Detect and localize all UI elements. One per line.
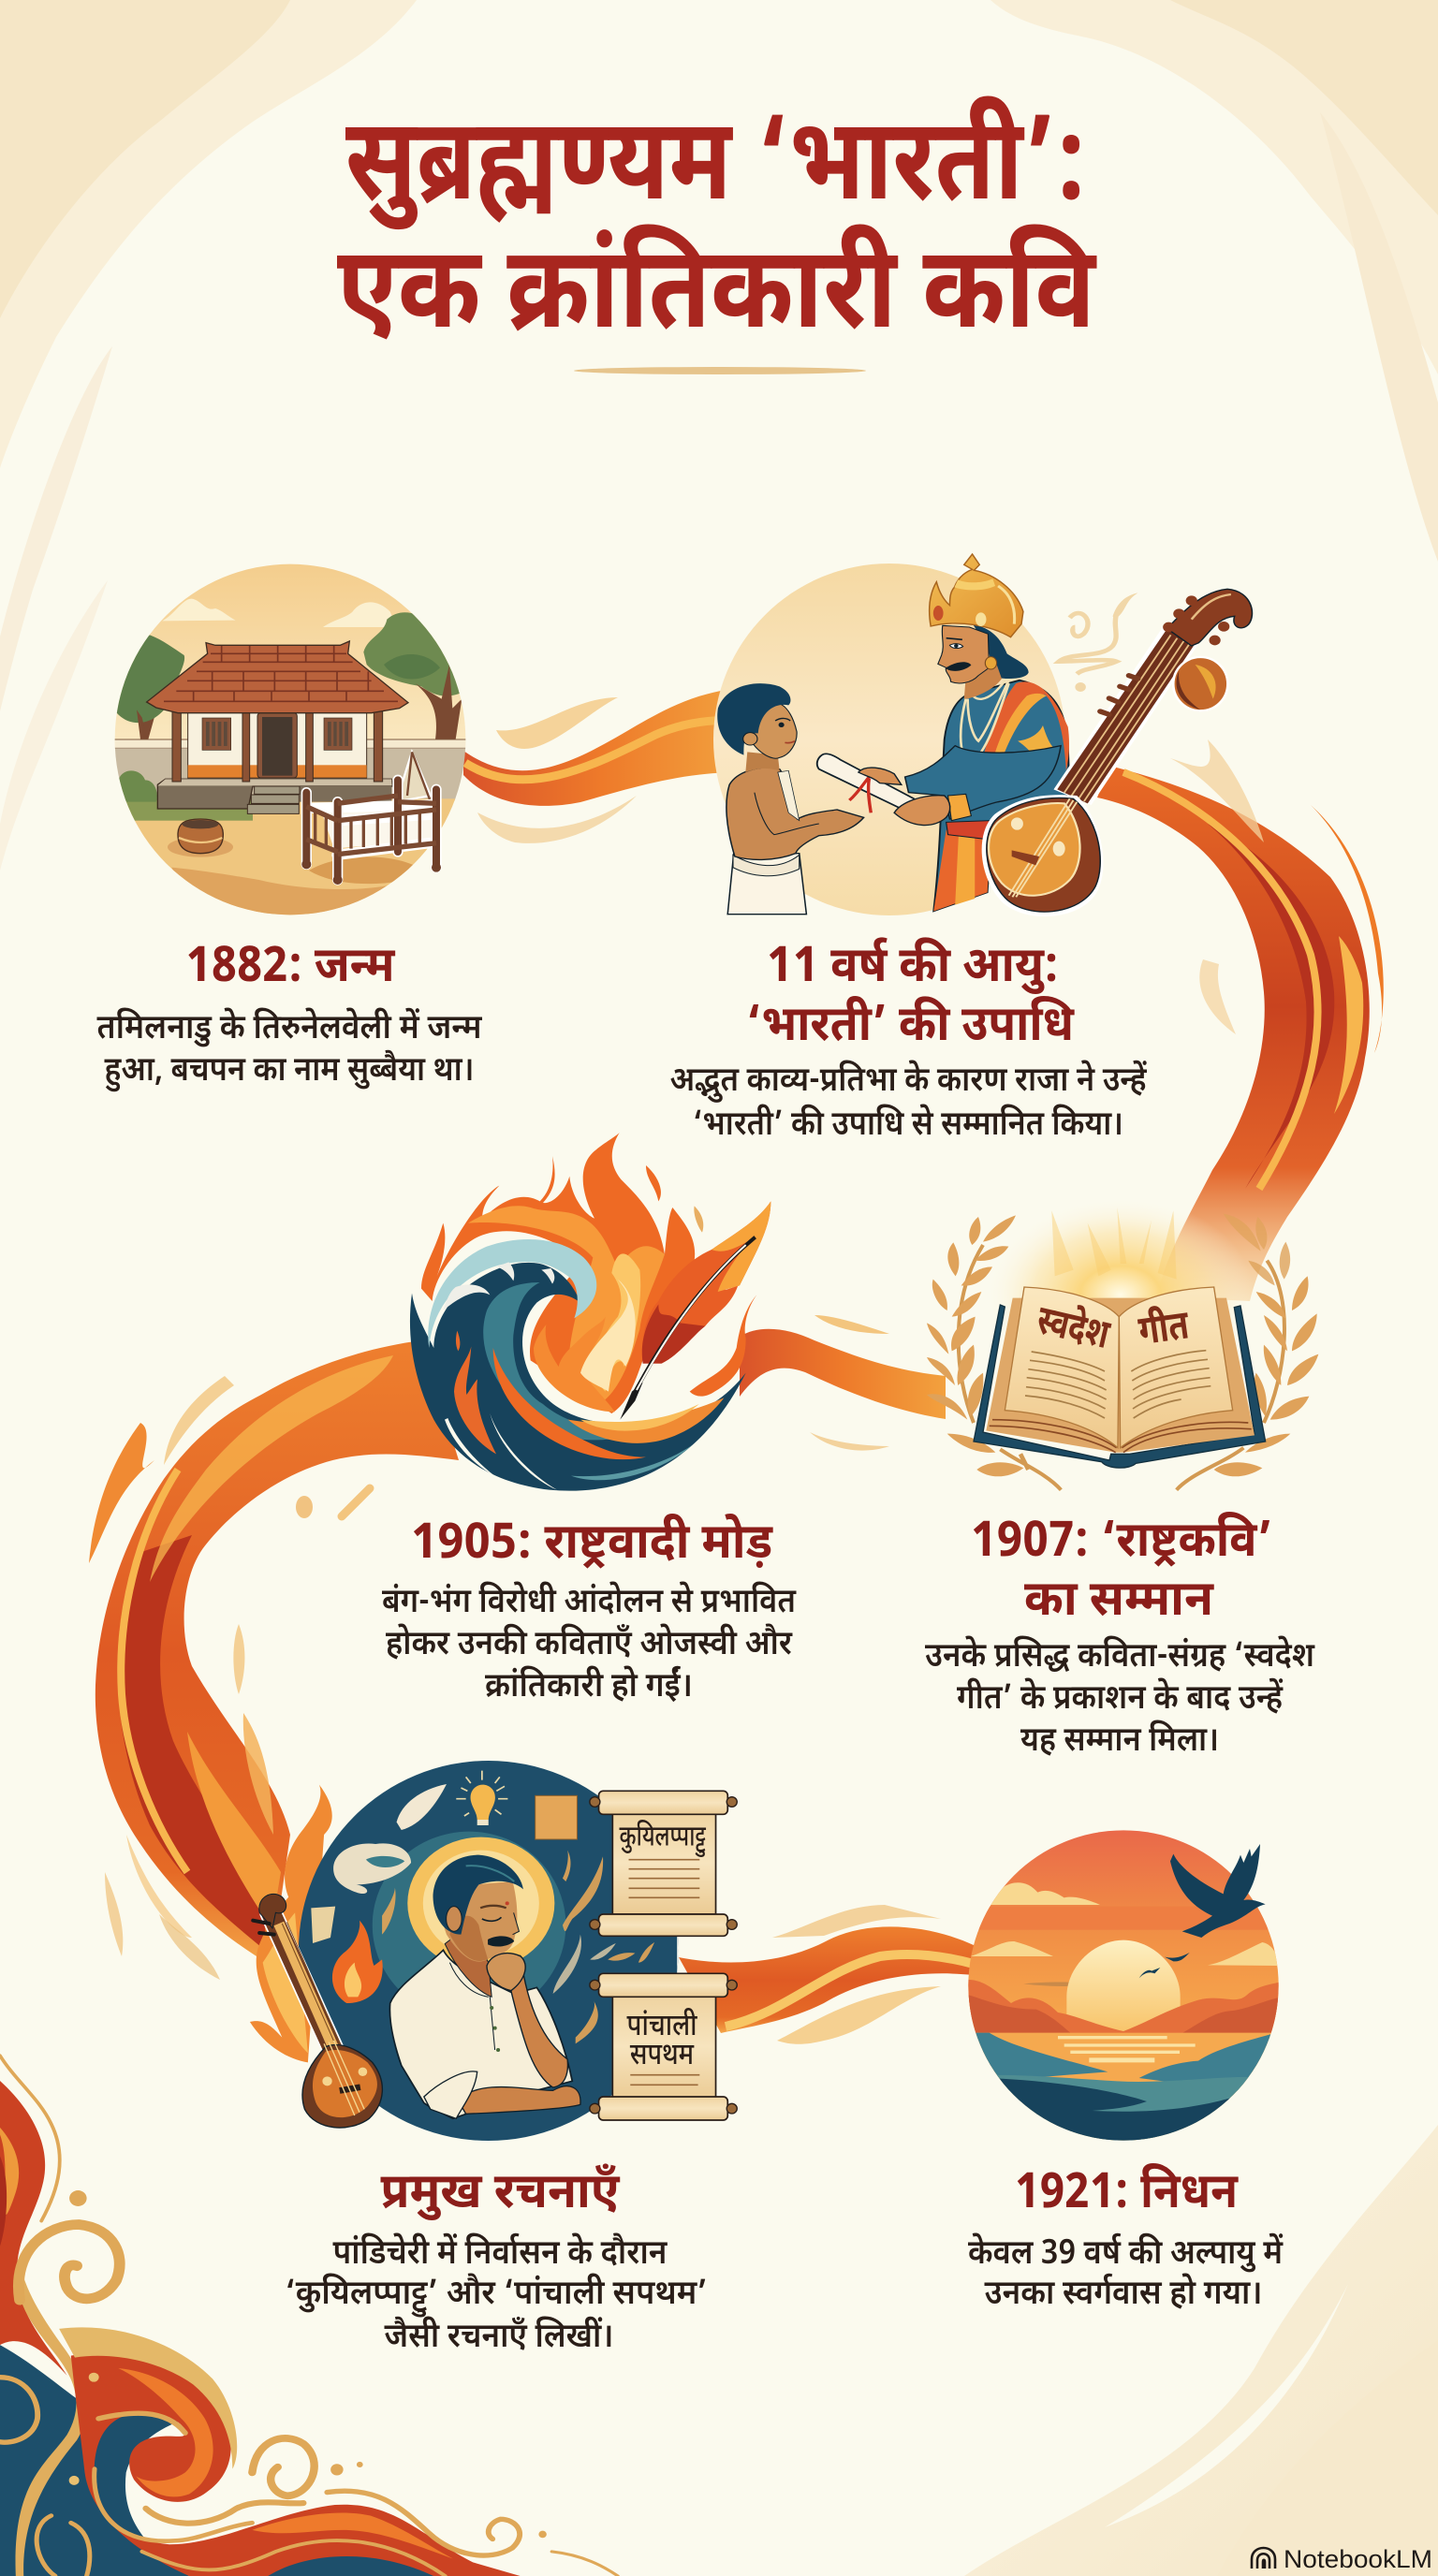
scroll: panchali sapatham: पांचाली [626, 2008, 698, 2048]
bird [1170, 1844, 1266, 1938]
illustration: wave, flame and quill [410, 1133, 770, 1491]
lower teal band [268, 2556, 433, 2576]
illustration: poet with veena and scrolls [250, 1750, 737, 2156]
milestone: 1921 death: 1921: निधन [1015, 2164, 1239, 2228]
milestone: 1907 national poet [925, 1513, 1315, 1764]
neck [445, 1925, 492, 1997]
milestone: 1882 birth: 1882: जन्म [185, 938, 396, 1002]
laurel left [927, 1215, 1061, 1490]
notebooklm badge: NotebookLM [1284, 2545, 1432, 2573]
milestone: 1907 national poet: गीत’ के प्रकाशन के बाद उन्हें [957, 1676, 1284, 1722]
motif: flame [332, 1921, 383, 2003]
boy [717, 683, 864, 915]
king neck [964, 658, 1002, 699]
motif: inkwell swirl [333, 1843, 411, 1894]
flames on wave [493, 1348, 646, 1459]
clay pot [168, 837, 233, 857]
veena [253, 1894, 382, 2128]
milestone: 1905 turning point: बंग-भंग विरोधी आंदोलन से प्रभावित [382, 1580, 797, 1626]
scroll [817, 754, 915, 810]
milestone: age 11 title: ‘भारती’ की उपाधि [746, 996, 1075, 1061]
armband [1018, 725, 1055, 759]
white streaks [445, 1413, 557, 1490]
gold strokes [0, 2056, 618, 2576]
milestone: 1907 national poet: 1907: ‘राष्ट्रकवि’ [971, 1513, 1272, 1576]
milestone: 1921 death: उनका स्वर्गवास हो गया। [985, 2273, 1262, 2318]
sun [1066, 1940, 1181, 2033]
shirt [389, 1950, 572, 2118]
cradle [301, 752, 441, 885]
house platform [157, 779, 393, 809]
quill shaft [620, 1383, 643, 1420]
ribbon: works to 1921 [679, 1905, 974, 2044]
milestone: 1882 birth: हुआ, बचपन का नाम सुब्बैया था। [105, 1048, 474, 1094]
red flame column [0, 2081, 67, 2376]
pages [1005, 1287, 1119, 1448]
milestone: age 11 title: 11 वर्ष की आयु: [767, 937, 1059, 1002]
feather [642, 1201, 770, 1364]
necklaces [961, 681, 1009, 765]
scroll: kuyil pattu [590, 1791, 737, 1936]
house wall [188, 704, 367, 778]
door [257, 713, 297, 778]
wave body [410, 1263, 746, 1491]
glow [986, 1198, 1255, 1392]
motif: feather [397, 1784, 447, 1830]
ribbon: 1905 to book [740, 1315, 946, 1451]
sun disc behind king [713, 564, 1065, 915]
inner flames [534, 1317, 615, 1412]
king robe [933, 681, 1069, 911]
decorative corner wash: bottom right [964, 2125, 1438, 2576]
page lines [1025, 1351, 1211, 1418]
milestone: major works: जैसी रचनाएँ लिखीं। [384, 2315, 614, 2361]
milestone: 1905 turning point [382, 1515, 797, 1710]
dhoti [933, 830, 990, 911]
page title: geet: गीत [1136, 1301, 1194, 1361]
page stack [986, 1298, 1255, 1453]
book cover [974, 1305, 1266, 1468]
side flames [250, 1785, 332, 2062]
milestone: major works: ‘कुयिलप्पाट्टु’ और ‘पांचाली सपथम’ [285, 2273, 708, 2318]
scroll: kuyil pattu: कुयिलप्पाट्टु [620, 1819, 706, 1858]
small birds [1139, 1953, 1190, 1978]
milestone: 1907 national poet: का सम्मान [1024, 1572, 1214, 1635]
pillars [172, 704, 383, 782]
hand [487, 1954, 525, 1991]
face [437, 1881, 517, 1962]
halo [407, 1837, 554, 1969]
gold column [15, 2264, 86, 2576]
laurel right [1177, 1214, 1318, 1490]
king hair [973, 624, 1029, 679]
illustration: sunset circle [964, 1825, 1283, 2148]
motif streaks [382, 1851, 654, 2043]
portrait disc [299, 1761, 679, 2141]
red swirl [71, 2352, 521, 2576]
tiled roof [147, 641, 408, 713]
milestone: 1882 birth: तमिलनाडु के तिरुनेलवेली में जन्म [97, 1006, 483, 1052]
milestone: 1905 turning point: होकर उनकी कविताएँ ओजस्वी और [386, 1622, 792, 1668]
title [337, 96, 1097, 373]
milestone: 1921 death [968, 2164, 1284, 2318]
milestone: 1907 national poet: यह सम्मान मिला। [1020, 1720, 1219, 1764]
decorative corner washes: top right [990, 0, 1438, 562]
king face [938, 625, 990, 683]
milestone: major works: पांडिचेरी में निर्वासन के दौरान [333, 2232, 668, 2277]
scroll: panchali sapatham [590, 1973, 737, 2120]
outer flames [421, 1133, 695, 1413]
sky [112, 562, 468, 749]
veena [982, 589, 1252, 916]
title divider [574, 367, 866, 374]
shawl [978, 681, 1069, 783]
corner ornament: bottom left swirl [0, 2056, 618, 2576]
compound wall [112, 739, 468, 748]
illustration: birth house and cradle [112, 562, 468, 924]
hair [433, 1855, 523, 1935]
poet figure [389, 1855, 580, 2118]
milestone: major works: प्रमुख रचनाएँ [380, 2163, 621, 2228]
milestone: 1905 turning point: क्रांतिकारी हो गईं। [485, 1665, 693, 1710]
gold sweep over swirl [59, 2327, 237, 2469]
ribbon: 1905 down to works [89, 1340, 459, 1980]
title: सुब्रह्मण्यम ‘भारती’: [345, 96, 1087, 245]
arm [905, 746, 1061, 819]
trees [142, 718, 154, 739]
swirl [1059, 613, 1116, 674]
ground [125, 798, 455, 915]
title: एक क्रांतिकारी कवि [337, 225, 1097, 373]
milestone: age 11 title: अद्भुत काव्य-प्रतिभा के कारण राजा ने उन्हें [670, 1059, 1147, 1105]
illustration: glowing book with laurel [927, 1198, 1318, 1490]
forearm [458, 2086, 580, 2114]
windows [202, 718, 352, 750]
milestone: 1905 turning point: 1905: राष्ट्रवादी मोड़ [411, 1515, 773, 1578]
motif: small book [311, 1907, 335, 1943]
motif: parchment [536, 1795, 577, 1839]
teal base [0, 2345, 189, 2576]
mountains [964, 1980, 1283, 2034]
arm to chin [511, 1956, 567, 2087]
king hands [858, 768, 902, 784]
milestone: age 11 title: ‘भारती’ की उपाधि से सम्मानित किया। [693, 1103, 1123, 1149]
illustration: king and boy with veena [717, 554, 1252, 916]
motif: bulb [456, 1771, 507, 1825]
milestone: major works [285, 2163, 708, 2361]
milestone: age 11 title [670, 937, 1147, 1149]
ribbon: birth to title [463, 688, 740, 843]
page title: swadesh: स्वदेश [1032, 1296, 1115, 1365]
decorative corner washes: top left [0, 0, 417, 871]
ribbon: title honour to book [1097, 739, 1384, 1301]
milestone: 1907 national poet: उनके प्रसिद्ध कविता-संग्रह ‘स्वदेश [925, 1634, 1315, 1680]
teal swell [483, 1282, 643, 1440]
scroll: panchali sapatham: सपथम [630, 2038, 695, 2077]
sea [976, 2033, 1271, 2141]
milestone: 1921 death: केवल 39 वर्ष की अल्पायु में [968, 2232, 1284, 2277]
steps [247, 786, 300, 813]
milestone: 1882 birth [97, 938, 483, 1094]
crown [930, 554, 1023, 637]
